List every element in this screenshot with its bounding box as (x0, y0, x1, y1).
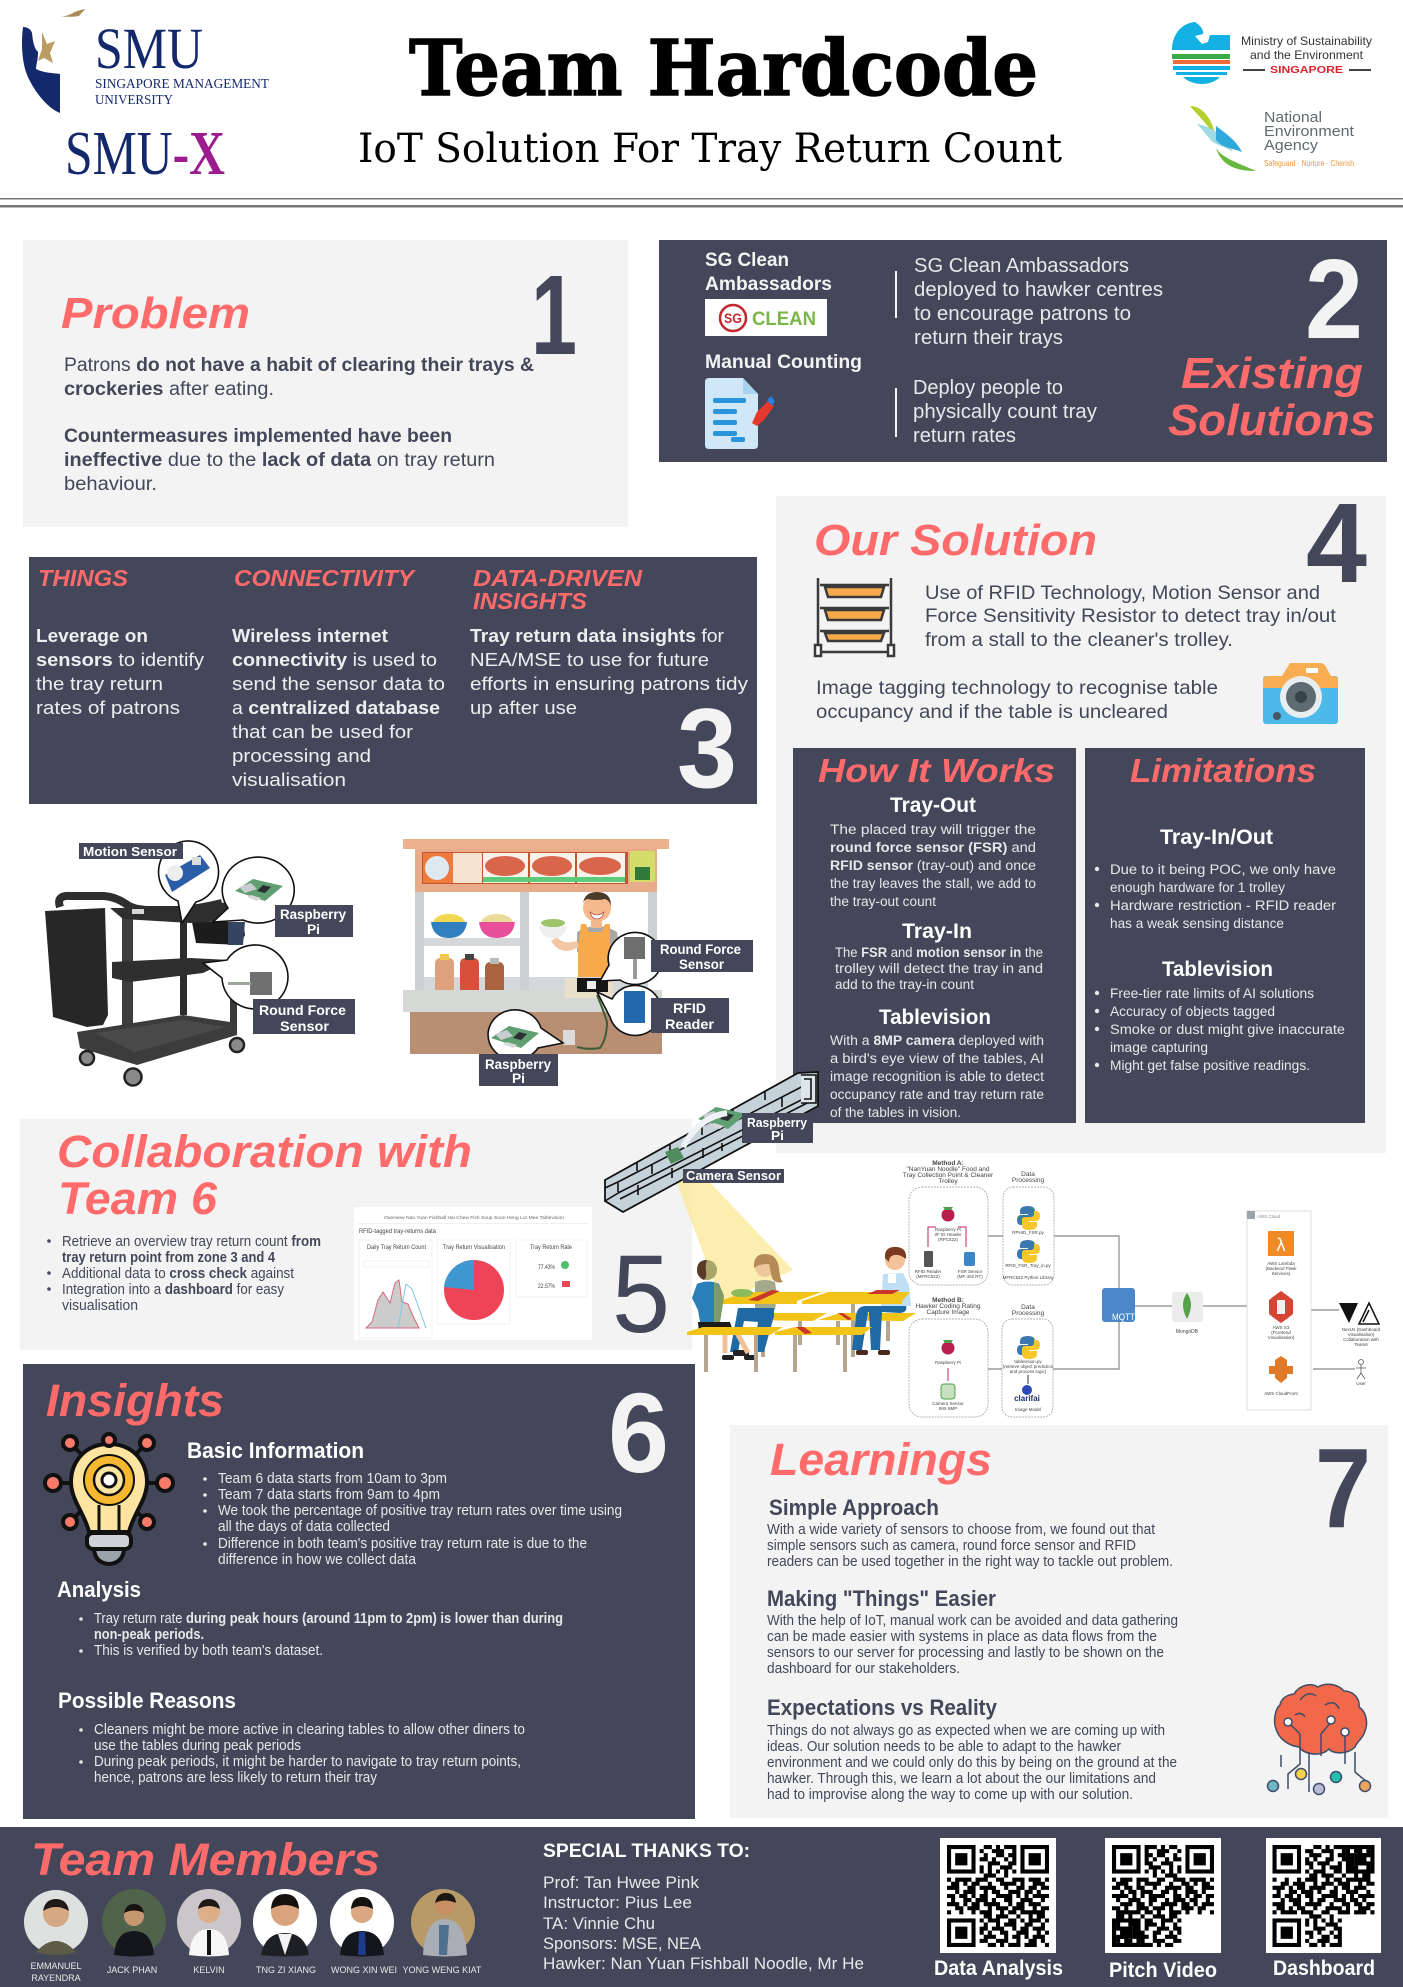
stall (403, 839, 669, 1054)
dashboard screenshot: Tray Return Visualisation (443, 1245, 505, 1251)
callout: round force sensor (600, 932, 753, 984)
panel 4: our solution (776, 480, 1386, 1153)
tablevision: occupancy rate and tray return rate (830, 1087, 1044, 1102)
method B: Method B: (932, 1297, 964, 1304)
AWS cloud: AWS S3 (1273, 1325, 1290, 1330)
Next.js frontend (1339, 1303, 1381, 1347)
column: data-driven insights: DATA-DRIVEN (473, 565, 642, 591)
label: camera sensor: Camera Sensor (686, 1168, 781, 1183)
description: ambassadors: to encourage patrons to (914, 303, 1131, 325)
possible reasons (58, 1688, 525, 1786)
tray-in: Tray-In (902, 920, 972, 943)
AWS cloud (1247, 1211, 1311, 1410)
callout: RFID reader: RFID (673, 1000, 706, 1016)
logo: SMU (22, 9, 269, 113)
basic information: Team 7 data starts from 9am to 4pm (218, 1487, 440, 1503)
possible reasons: Possible Reasons (58, 1688, 236, 1713)
column: connectivity: visualisation (232, 769, 346, 790)
method B: IMX 8MP (939, 1406, 957, 1411)
wall with camera and raspberry pi (605, 1072, 818, 1212)
tray-in: trolley will detect the tray in and (835, 961, 1043, 976)
basic information: We took the percentage of positive tray return rates over time using (218, 1503, 622, 1519)
dashboard screenshot (354, 1207, 592, 1340)
AWS cloud: AWS Lambda (1267, 1261, 1295, 1266)
Next.js frontend: Team6 (1354, 1342, 1368, 1347)
label: SG Clean Ambassadors (705, 250, 832, 295)
MQTT: MQTT (1112, 1312, 1135, 1322)
callout: round force sensor: Round Force (259, 1002, 346, 1018)
tray-in: add to the tray-in count (835, 977, 974, 992)
method A: (MF 402 RT) (957, 1274, 983, 1279)
basic information: Basic Information (187, 1438, 364, 1463)
column: connectivity: a centralized database (232, 697, 440, 718)
description: manual counting: Deploy people to (913, 377, 1063, 399)
basic information: all the days of data collected (218, 1519, 390, 1535)
tray-out: the tray-out count (830, 894, 936, 909)
method A: "NanYuan Noodle" Food and (906, 1166, 990, 1173)
callout: round force sensor: Sensor (280, 1018, 330, 1034)
AWS cloud: AWS CloudFront (1264, 1391, 1299, 1396)
logo: SMU: UNIVERSITY (95, 93, 173, 108)
heading: Our Solution: Our Solution (814, 516, 1097, 565)
method B data processing: and process logic) (1010, 1369, 1047, 1374)
callout: raspberry pi: Raspberry (485, 1057, 551, 1072)
heading: How It Works: How It Works (818, 752, 1055, 789)
solution text: RFID: Use of RFID Technology, Motion Sensor and (925, 582, 1320, 604)
problem text: crockeries after eating. (64, 379, 274, 400)
limitations: tablevision: Accuracy of objects tagged (1110, 1004, 1275, 1019)
icon: SG Clean logo (705, 299, 827, 336)
label: raspberry pi: Raspberry (747, 1115, 808, 1130)
logo: SMU: SMU (95, 16, 203, 81)
light cone (675, 1172, 793, 1303)
heading: Problem: Problem (61, 289, 250, 338)
dashboard screenshot: RFID-tagged tray-returns data (359, 1228, 436, 1235)
limitations: tray-in/out: has a weak sensing distance (1110, 916, 1284, 931)
method B: Camera Sensor (932, 1401, 964, 1406)
AWS cloud: Visualisation) (1268, 1335, 1295, 1340)
number 6: 6 (608, 1370, 669, 1496)
analysis: Analysis (57, 1577, 141, 1602)
logo: National Environment Agency (1190, 106, 1355, 171)
column: connectivity: send the sensor data to (232, 673, 445, 694)
method A data processing: MFRC522 Python Library (1003, 1275, 1054, 1280)
solution text: image tagging (816, 677, 1218, 723)
limitations: tablevision (1095, 958, 1345, 1073)
tablevision: With a 8MP camera deployed with (830, 1033, 1044, 1048)
method A: Raspberry Pi (935, 1227, 961, 1232)
logo: Ministry of Sustainability and the Environment: Ministry of Sustainability (1241, 34, 1372, 48)
making things easier: With the help of IoT, manual work can be avoided and data gathering (767, 1613, 1178, 1629)
limitations: tray-in/out: enough hardware for 1 trolley (1110, 880, 1285, 895)
column: connectivity: that can be used for (232, 721, 413, 742)
simple approach (767, 1495, 1173, 1570)
AWS cloud: (Frontend (1271, 1330, 1291, 1335)
callout: raspberry pi: Raspberry (280, 907, 346, 922)
user (1356, 1360, 1366, 1386)
special thanks (543, 1841, 864, 1973)
method A: (MFRC522) (916, 1274, 940, 1279)
callout: raspberry pi (479, 1010, 563, 1086)
team member names: RAYENDRA (31, 1973, 81, 1983)
column: data-driven insights: Tray return data insights for (470, 625, 724, 646)
team member names: JACK PHAN (107, 1965, 157, 1975)
heading: Limitations: Limitations (1130, 752, 1316, 789)
dashboard screenshot: 77.43% (538, 1265, 556, 1271)
label: raspberry pi (742, 1113, 813, 1143)
special thanks: Sponsors: MSE, NEA (543, 1934, 702, 1953)
tray-in (835, 920, 1043, 992)
special thanks: Prof: Tan Hwee Pink (543, 1873, 699, 1892)
user: User (1356, 1381, 1366, 1386)
collaboration bullets: Retrieve an overview tray return count from (62, 1234, 321, 1250)
logo: Ministry of Sustainability and the Environment: and the Environment (1250, 48, 1364, 62)
icon: tray rack (815, 578, 894, 656)
dashboard screenshot: Daily Tray Return Count (367, 1245, 426, 1251)
column: things (36, 565, 205, 718)
heading: Insights: Insights (46, 1375, 224, 1426)
number 5: 5 (612, 1233, 670, 1356)
method A data processing: RPHID_FSR.py (1012, 1230, 1044, 1235)
analysis: This is verified by both team's dataset. (94, 1643, 323, 1659)
expectations vs reality: had to improvise along the way to come up with our solution. (767, 1787, 1133, 1803)
column: connectivity: processing and (232, 745, 371, 766)
AWS cloud: (Backend Flask (1265, 1266, 1297, 1271)
expectations vs reality: Things do not always go as expected when we are coming up with (767, 1723, 1165, 1739)
expectations vs reality: Expectations vs Reality (767, 1695, 998, 1720)
making things easier: sensors to our server for processing and lastly to be shown on the (767, 1645, 1164, 1661)
column: data-driven insights: NEA/MSE to use for future (470, 649, 709, 670)
icon: lightbulb with gear (45, 1434, 173, 1564)
expectations vs reality (767, 1695, 1177, 1803)
possible reasons: use the tables during peak periods (94, 1738, 301, 1754)
dashboard screenshot: 22.57% (538, 1284, 556, 1290)
column: things: THINGS (38, 565, 129, 591)
special thanks: Instructor: Pius Lee (543, 1893, 692, 1912)
method A data processing: RFID_FSR_Tray_in.py (1005, 1263, 1051, 1268)
callout: round force sensor: Round Force (660, 941, 741, 957)
logo: Ministry of Sustainability and the Environment (1172, 22, 1372, 84)
tray-out: round force sensor (FSR) and (830, 840, 1036, 855)
QR code: Data Analysis: Data Analysis (934, 1957, 1063, 1980)
solution text: RFID (925, 582, 1337, 651)
number 3: 3 (677, 685, 737, 811)
solution text: RFID: from a stall to the cleaner's trolley. (925, 629, 1233, 651)
AWS cloud: λ (1276, 1235, 1286, 1255)
method B data processing: Processing (1012, 1310, 1044, 1317)
QR code: Dashboard: Dashboard (1273, 1957, 1375, 1980)
basic information: Team 6 data starts from 10am to 3pm (218, 1471, 447, 1487)
dashboard screenshot: Tray Return Rate (530, 1245, 573, 1251)
tray-out: The placed tray will trigger the (830, 822, 1036, 837)
MongoDB: MongoDB (1176, 1329, 1199, 1335)
label: Manual Counting: Manual Counting (705, 352, 862, 373)
method B data processing (1002, 1304, 1054, 1417)
icon: brain circuit (1268, 1684, 1370, 1794)
method B: Capture Image (926, 1309, 970, 1316)
QR code: Data Analysis (934, 1838, 1063, 1980)
problem text: Patrons do not have a habit of clearing their trays & (64, 355, 534, 376)
icon: checklist (705, 378, 775, 449)
panel 6: insights (23, 1364, 695, 1819)
limitations: tablevision: Might get false positive readings. (1110, 1058, 1310, 1073)
column: data-driven insights: efforts in ensuring patrons tidy (470, 673, 749, 694)
QR code: Dashboard (1266, 1838, 1381, 1980)
logo: National Environment Agency: National (1264, 109, 1322, 126)
callout: round force sensor (203, 945, 355, 1034)
method A: RFID Reader (915, 1269, 942, 1274)
column: data-driven insights: up after use (470, 697, 577, 718)
tray-in: The FSR and motion sensor in the (835, 945, 1043, 960)
description: ambassadors (895, 255, 1163, 349)
expectations vs reality: ideas. Our solution needs to be able to adapt to the hawker (767, 1739, 1121, 1755)
column: connectivity (232, 565, 445, 790)
heading: Learnings: Learnings (770, 1434, 992, 1485)
method B data processing: Image Model (1015, 1407, 1041, 1412)
making things easier (767, 1586, 1178, 1677)
column: things: rates of patrons (36, 697, 180, 718)
column: things: the tray return (36, 673, 163, 694)
method A data processing: Processing (1012, 1177, 1044, 1184)
AWS cloud: AWS Cloud (1257, 1214, 1281, 1219)
tablevision: a bird's eye view of the tables, AI (830, 1051, 1044, 1066)
simple approach: simple sensors such as camera, round force sensor and RFID (767, 1538, 1136, 1554)
icon: camera (1263, 663, 1338, 724)
possible reasons: hence, patrons are less likely to return their tray (94, 1770, 378, 1786)
method A (903, 1160, 994, 1285)
method A: Tray Collection Point & Cleaner (903, 1172, 994, 1179)
method B data processing: Data (1021, 1304, 1035, 1311)
logo: SMU-X: SMU-X (65, 120, 225, 188)
tablevision: image recognition is able to detect (830, 1069, 1044, 1084)
heading: Collaboration with Team 6: Team 6 (58, 1173, 218, 1224)
column: connectivity: Wireless internet (232, 625, 388, 646)
limitations: tray-in/out: Tray-In/Out (1160, 826, 1273, 849)
MongoDB (1172, 1292, 1203, 1335)
icon: SG Clean logo: CLEAN (752, 309, 816, 330)
method B: Hawker Coding Rating (915, 1303, 981, 1310)
possible reasons: Cleaners might be more active in clearing tables to allow other diners to (94, 1722, 525, 1738)
collaboration bullets (47, 1234, 321, 1314)
problem text: Countermeasures implemented have been (64, 426, 452, 447)
column: data-driven insights: INSIGHTS (473, 588, 588, 614)
method A: Trolley (938, 1178, 958, 1185)
column: things: sensors to identify (36, 649, 205, 670)
column: connectivity: connectivity is used to (232, 649, 437, 670)
panel 1: problem (23, 240, 628, 527)
header (0, 9, 1403, 208)
expectations vs reality: environment and we could only do this by being on the ground at the (767, 1755, 1177, 1771)
logo: SMU: SINGAPORE MANAGEMENT (95, 77, 269, 92)
panel 2: existing solutions (659, 236, 1387, 462)
solution text: RFID: Force Sensitivity Resistor to detect tray in/out (925, 605, 1337, 627)
collaboration bullets: Integration into a dashboard for easy (62, 1282, 285, 1298)
limitations: tablevision: image capturing (1110, 1040, 1208, 1055)
team member names: EMMANUEL (30, 1961, 82, 1971)
illustration: tablevision camera scene (605, 1072, 916, 1372)
dashboard screenshot: Overview Nan Yuan Fishball Hai Chew Fish Soup Soon Heng Lor Mee Tablevision (384, 1215, 565, 1220)
description: manual counting: physically count tray (913, 401, 1097, 423)
analysis (57, 1577, 563, 1659)
panel 5: collaboration (20, 1119, 692, 1356)
limitations: tablevision: Smoke or dust might give inaccurate (1110, 1022, 1345, 1037)
QR code: Pitch Video: Pitch Video (1109, 1959, 1217, 1982)
heading: Team Members: Team Members (31, 1834, 380, 1885)
heading: Existing Solutions (1168, 349, 1375, 445)
basic information: Difference in both team's positive tray return rate is due to the (218, 1536, 587, 1552)
QR code: Pitch Video (1105, 1838, 1221, 1982)
making things easier: can be made easier with systems in place as data flows from the (767, 1629, 1157, 1645)
logo: National Environment Agency: Safeguard · Nurture · Cherish (1264, 159, 1354, 168)
problem text: ineffective due to the lack of data on tray return (64, 450, 495, 471)
special thanks: TA: Vinnie Chu (543, 1914, 655, 1933)
analysis: Tray return rate during peak hours (around 11pm to 2pm) is lower than during (94, 1611, 563, 1627)
solution text: image tagging: Image tagging technology to recognise table (816, 677, 1218, 699)
method A: I/F ID Header (934, 1232, 962, 1237)
method A data processing (1003, 1171, 1054, 1285)
team member portraits (24, 1889, 475, 1956)
panel: how it works (793, 748, 1076, 1123)
possible reasons: During peak periods, it might be harder to navigate to tray return points, (94, 1754, 521, 1770)
method B: Raspberry Pi (935, 1360, 961, 1365)
number 4: 4 (1306, 480, 1367, 606)
tablevision: Tablevision (879, 1006, 991, 1029)
simple approach: With a wide variety of sensors to choose from, we found out that (767, 1522, 1155, 1538)
callout: raspberry pi: Pi (307, 922, 320, 937)
callout: RFID reader: Reader (665, 1016, 715, 1032)
panel: limitations (1085, 748, 1365, 1123)
Next.js frontend: NextJs (Dashboard (1342, 1327, 1381, 1332)
collaboration bullets: visualisation (62, 1298, 138, 1314)
special thanks: Hawker: Nan Yuan Fishball Noodle, Mr He (543, 1954, 864, 1973)
limitations: tablevision: Tablevision (1162, 958, 1273, 981)
expectations vs reality: hawker. Through this, we learn a lot about the our limitations and (767, 1771, 1156, 1787)
label: SG Clean Ambassadors: Ambassadors (705, 274, 832, 295)
callout: RFID reader (597, 985, 729, 1035)
number 2: 2 (1305, 236, 1363, 362)
label: SG Clean Ambassadors: SG Clean (705, 250, 789, 271)
analysis: non-peak periods. (94, 1627, 204, 1643)
illustration: trolley with sensors (45, 841, 355, 1086)
tablevision (830, 1006, 1044, 1120)
method B data processing: tablevision.py (1014, 1359, 1042, 1364)
description: manual counting (895, 377, 1097, 447)
MQTT (1102, 1288, 1135, 1322)
hawker (539, 892, 620, 1049)
making things easier: Making "Things" Easier (767, 1586, 996, 1611)
making things easier: dashboard for our stakeholders. (767, 1661, 960, 1677)
heading: Collaboration with Team 6 (57, 1126, 472, 1224)
connectors (988, 1236, 1355, 1369)
tray-out: the tray leaves the stall, we add to (830, 876, 1036, 891)
method B (909, 1297, 988, 1417)
Next.js frontend: Collaboration with (1343, 1337, 1379, 1342)
Next.js frontend: Visualisation) (1348, 1332, 1375, 1337)
footer panel (0, 1827, 1403, 1987)
column: things: Leverage on (36, 625, 148, 646)
heading: Collaboration with Team 6: Collaboration with (57, 1126, 472, 1177)
tray-out (830, 794, 1036, 909)
illustration: hawker stall with sensors (403, 839, 753, 1086)
special thanks: SPECIAL THANKS TO: (543, 1841, 750, 1862)
panel 3: IoT pillars (29, 557, 757, 811)
number 7: 7 (1315, 1425, 1371, 1551)
system architecture diagram (903, 1160, 1381, 1417)
heading: Existing Solutions: Solutions (1168, 396, 1375, 445)
icon: SG Clean logo: SG (724, 310, 742, 326)
callout: motion sensor (79, 841, 219, 923)
basic information (187, 1438, 622, 1568)
logo: Ministry of Sustainability and the Environment: SINGAPORE (1270, 65, 1343, 76)
diners at table (687, 1247, 916, 1372)
logo: National Environment Agency: Agency (1264, 137, 1319, 154)
problem text (64, 355, 534, 495)
limitations: tablevision: Free-tier rate limits of AI solutions (1110, 986, 1314, 1001)
number 1: 1 (531, 252, 577, 378)
method A: Method A: (932, 1160, 964, 1167)
AWS cloud: Services) (1272, 1271, 1291, 1276)
team member names: KELVIN (193, 1965, 225, 1975)
solution text: image tagging: occupancy and if the table is uncleared (816, 701, 1168, 723)
logo: National Environment Agency: Environment (1264, 123, 1355, 140)
title: Team Hardcode (409, 24, 1038, 114)
callout: raspberry pi: Pi (512, 1071, 525, 1086)
callout: round force sensor: Sensor (679, 956, 725, 972)
method A: FSR Sensor (958, 1269, 983, 1274)
subtitle: IoT Solution For Tray Return Count (358, 126, 1062, 172)
description: ambassadors: return their trays (914, 327, 1063, 349)
team member names (30, 1961, 482, 1983)
label: raspberry pi: Pi (771, 1128, 784, 1143)
panel 7: learnings (730, 1425, 1388, 1818)
callout: motion sensor: Motion Sensor (83, 844, 177, 859)
limitations: tray-in/out: Due to it being POC, we only have (1110, 862, 1336, 877)
method A: (RPC522) (938, 1237, 958, 1242)
simple approach: readers can be used together in the right way to tackle out problem. (767, 1554, 1173, 1570)
description: ambassadors: deployed to hawker centres (914, 279, 1163, 301)
description: manual counting: return rates (913, 425, 1016, 447)
callout: raspberry pi (213, 857, 353, 937)
column: connectivity: CONNECTIVITY (234, 565, 417, 591)
collaboration bullets: tray return point from zone 3 and 4 (62, 1250, 275, 1266)
limitations: tray-in/out: Hardware restriction - RFID reader (1110, 898, 1337, 913)
team member names: YONG WENG KIAT (403, 1965, 482, 1975)
problem text: behaviour. (64, 474, 157, 495)
team member names: TNG ZI XIANG (256, 1965, 316, 1975)
basic information: difference in how we collect data (218, 1552, 417, 1568)
team member names: WONG XIN WEI (331, 1965, 397, 1975)
method A data processing: Data (1021, 1171, 1035, 1178)
simple approach: Simple Approach (769, 1495, 939, 1520)
column: data-driven insights (470, 565, 749, 718)
tray-out: Tray-Out (890, 794, 976, 817)
trolley (45, 896, 245, 1086)
heading: Existing Solutions: Existing (1181, 349, 1363, 398)
tablevision: of the tables in vision. (830, 1105, 961, 1120)
description: ambassadors: SG Clean Ambassadors (914, 255, 1129, 277)
tray-out: RFID sensor (tray-out) and once (830, 858, 1036, 873)
method B data processing: clarifai (1014, 1394, 1040, 1403)
method B data processing: (retrieve object prediction (1003, 1364, 1054, 1369)
limitations: tray-in/out (1095, 826, 1337, 931)
collaboration bullets: Additional data to cross check against (62, 1266, 294, 1282)
